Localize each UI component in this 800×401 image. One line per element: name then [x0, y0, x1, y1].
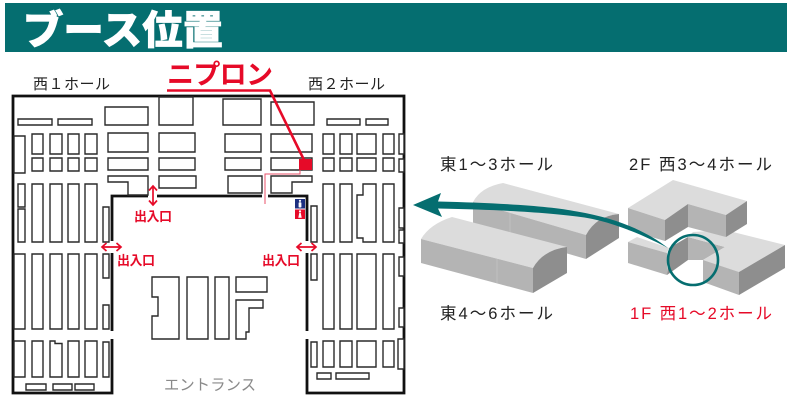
label: east halls 1-3: 東1～3ホール — [440, 155, 553, 174]
building: east halls 1-3 — [473, 183, 619, 259]
booths: west 1 hall — [14, 97, 196, 390]
thin red route line — [265, 170, 300, 204]
entrance label: west: 出入口 — [117, 253, 155, 268]
title banner: ブース位置 — [23, 8, 223, 53]
building: east halls 4-6 — [421, 217, 567, 293]
callout: Nipro booth name with leader line: ニプロン — [167, 60, 273, 90]
entrance arrow: west — [102, 243, 121, 251]
icon: restrooms — [295, 199, 305, 219]
booths: west 2 hall — [223, 99, 404, 379]
entrance arrow: east — [297, 243, 316, 251]
booth marker — [299, 159, 312, 170]
callout: Nipro booth name with leader line — [167, 60, 304, 160]
entrance label: east: 出入口 — [262, 253, 300, 268]
floor plan: west halls 1 and 2 — [13, 96, 404, 393]
entrance label: north: 出入口 — [134, 209, 172, 224]
label: west 1 hall: 西１ホール — [33, 76, 110, 93]
label: entrance: エントランス — [164, 377, 256, 394]
walls — [13, 96, 404, 393]
highlight circle — [668, 235, 718, 285]
title banner — [5, 3, 787, 53]
label: west halls 1-2 1F: 1F 西1～2ホール — [630, 305, 772, 323]
label: east halls 4-6: 東4～6ホール — [440, 304, 553, 323]
building: west halls 3-4 2F — [628, 180, 747, 241]
curved arrow from west hall to east halls — [413, 193, 668, 248]
booths: entrance centre — [152, 277, 267, 339]
label: west 2 hall: 西２ホール — [308, 76, 385, 93]
entrance arrow: north — [149, 186, 157, 205]
building: west halls 1F — [628, 230, 785, 295]
label: west halls 3-4 2F: 2F 西3～4ホール — [629, 156, 772, 174]
